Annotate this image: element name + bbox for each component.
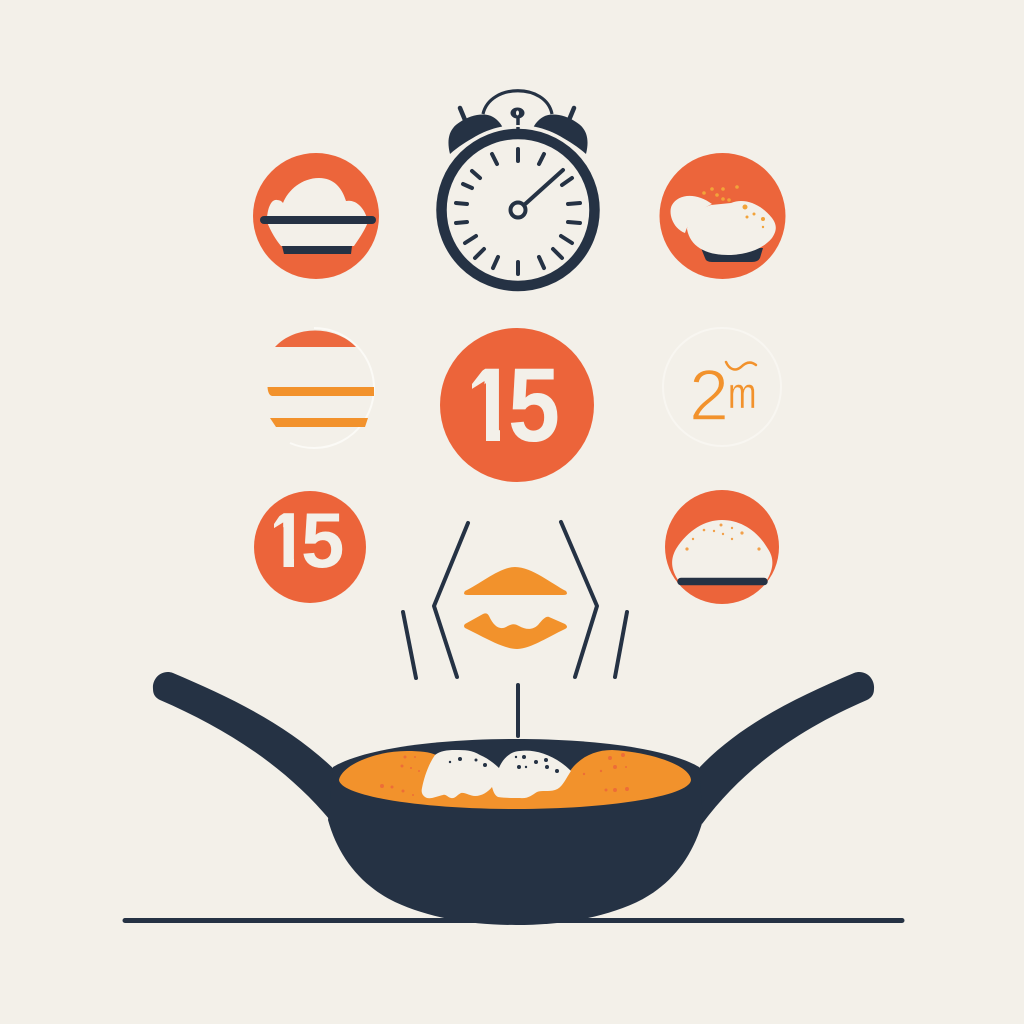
badge: large 15 bbox=[440, 328, 594, 482]
icon: alarm clock bbox=[434, 91, 602, 294]
badge: large 15: 5 bbox=[508, 347, 560, 464]
icon: tossed food top piece bbox=[464, 567, 567, 595]
right handle bbox=[697, 672, 874, 824]
badge: small 15: 1 bbox=[265, 496, 308, 584]
icon: striped circle bbox=[268, 328, 374, 448]
pepper specks bbox=[449, 755, 559, 773]
icon: tossed food bottom piece bbox=[464, 613, 567, 649]
spice specks bbox=[380, 753, 629, 796]
badge: large 15: 1 bbox=[460, 347, 518, 464]
curry sauce bbox=[339, 750, 691, 809]
icon: handwritten 2 minutes bbox=[663, 328, 781, 446]
dumplings bbox=[422, 750, 571, 798]
pan body bbox=[328, 739, 703, 925]
icon: steamed bun badge bbox=[665, 490, 779, 604]
icon: handwritten 2 minutes: 2 bbox=[689, 356, 729, 436]
badge: small 15: 5 bbox=[301, 496, 344, 584]
icon: handwritten 2 minutes: m bbox=[728, 369, 757, 418]
ground line bbox=[125, 918, 902, 923]
icon: rice bowl badge bbox=[253, 153, 379, 279]
left handle bbox=[153, 672, 335, 820]
steam and motion lines bbox=[403, 522, 627, 736]
wok pan bbox=[153, 672, 874, 925]
badge: small 15 bbox=[254, 491, 366, 603]
icon: dumplings in bowl badge bbox=[660, 153, 786, 279]
